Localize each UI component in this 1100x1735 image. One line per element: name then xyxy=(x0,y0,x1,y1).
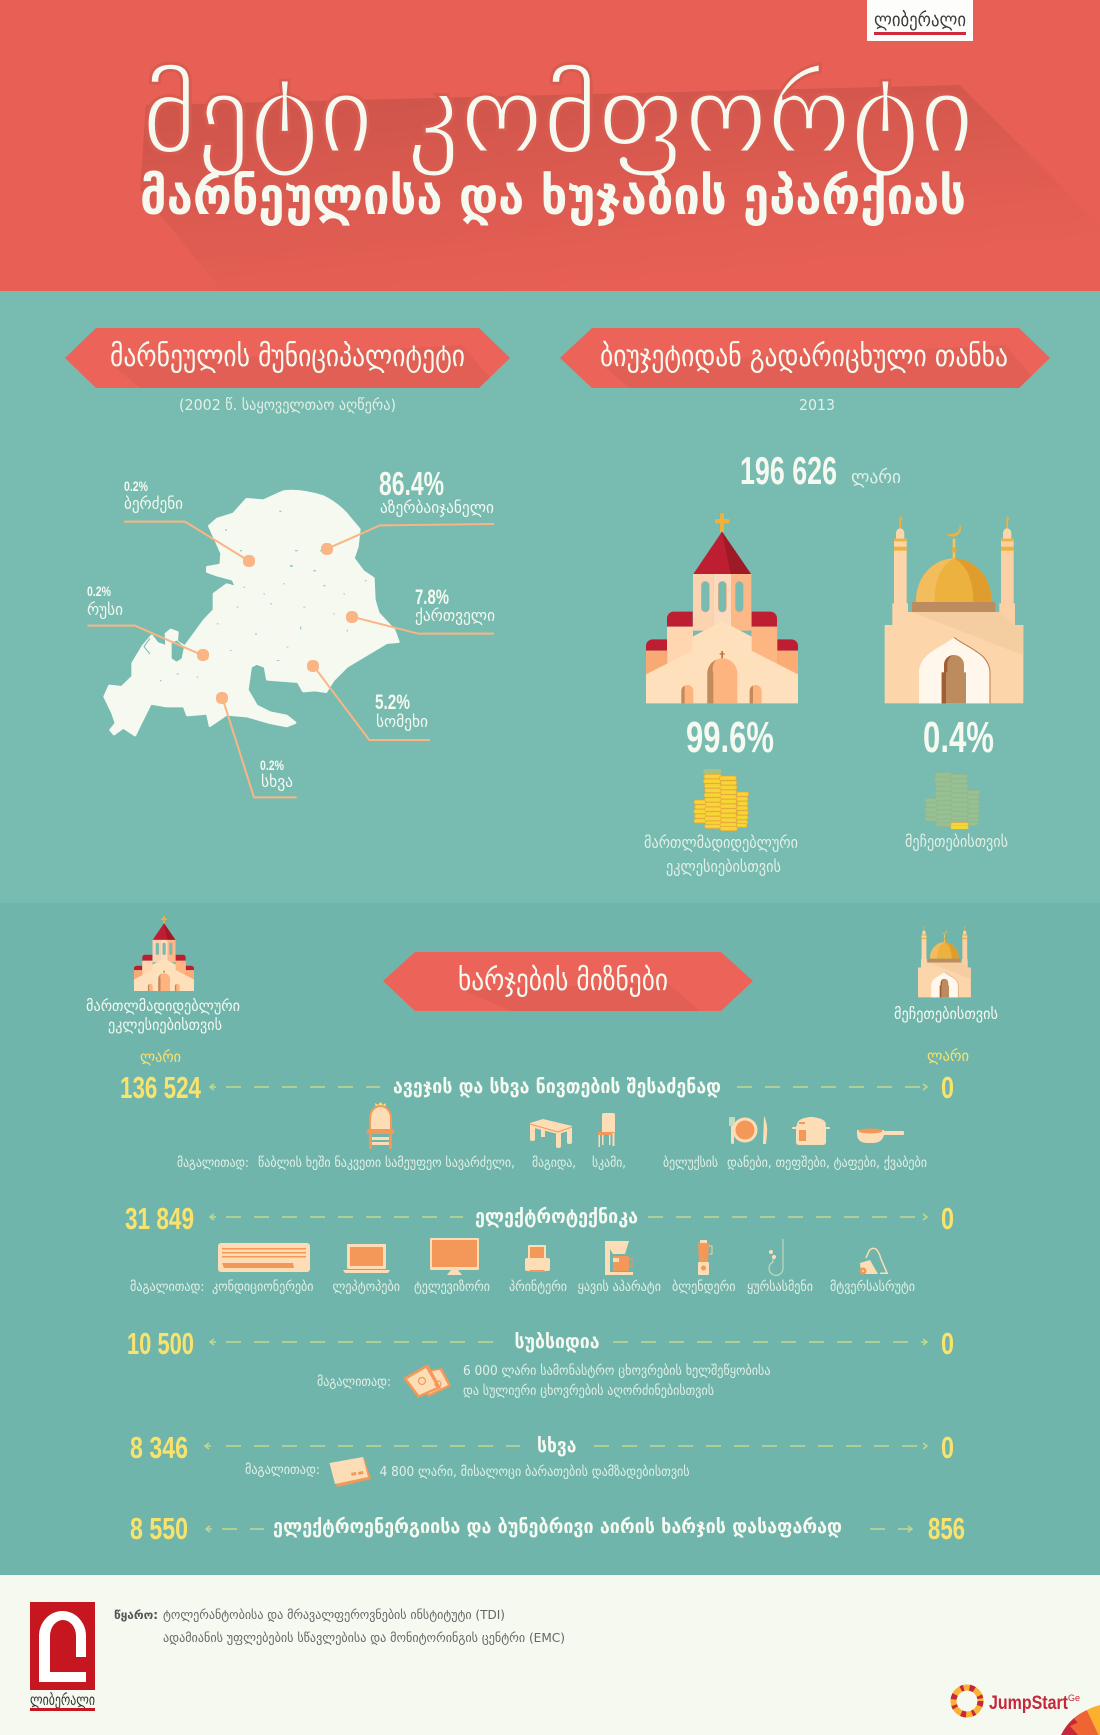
arrow right xyxy=(737,1084,927,1090)
icon: plate and cutlery xyxy=(729,1116,767,1144)
arrow right xyxy=(613,1339,927,1345)
background: teal page xyxy=(0,291,1100,904)
callout lines xyxy=(87,522,494,797)
row: subsidy: 10 500 xyxy=(127,1326,194,1361)
row: other: სხვა xyxy=(537,1433,576,1457)
row: furniture: ავეჯის და სხვა ნივთების შესაძენად xyxy=(393,1074,721,1098)
header panel xyxy=(0,0,1100,291)
label: Other: 0.2% xyxy=(260,757,284,773)
title long shadow xyxy=(140,85,1100,291)
row: electronics: 0 xyxy=(941,1201,954,1236)
arrow right xyxy=(594,1443,927,1449)
logo: JumpStart: JumpStart xyxy=(989,1693,1069,1714)
percent: mosques: 0.4% xyxy=(923,713,994,762)
banner: municipality xyxy=(65,328,510,388)
examples text: ბელუქსის xyxy=(663,1155,718,1171)
row: subsidy xyxy=(127,1326,954,1399)
label: Russian xyxy=(87,583,123,619)
label: Other: სხვა xyxy=(261,772,293,791)
arrow left xyxy=(210,1084,380,1090)
row: other: 0 xyxy=(941,1430,954,1465)
icon: blender xyxy=(698,1240,712,1275)
banner: municipality: მარნეულის მუნიციპალიტეტი xyxy=(110,339,465,374)
row: utilities xyxy=(130,1511,965,1546)
row: utilities: 856 xyxy=(928,1511,965,1546)
map: Marneuli ethnic composition xyxy=(87,465,495,797)
caption: mosques: მეჩეთებისთვის xyxy=(905,832,1008,851)
small church caption xyxy=(86,997,240,1034)
arrow left xyxy=(210,1214,463,1220)
sources xyxy=(114,1607,565,1645)
label: Greek: 0.2% xyxy=(124,478,148,494)
icon: coins faded stack xyxy=(925,773,980,829)
corner sun graphic xyxy=(1061,1705,1100,1735)
row: other: მაგალითად: xyxy=(245,1462,320,1478)
row: electronics: 31 849 xyxy=(125,1201,194,1236)
banner: spending purposes: ხარჯების მიზნები xyxy=(458,963,668,998)
subsidy description: და სულიერი ცხოვრების აღორძინებისთვის xyxy=(463,1382,714,1399)
subsidy description xyxy=(463,1362,771,1399)
label: Russian: 0.2% xyxy=(87,583,111,599)
icon: chair xyxy=(598,1113,615,1147)
label: Azerbaijani: 86.4% xyxy=(379,465,444,502)
logo: Liberali xyxy=(30,1602,95,1711)
label: Other xyxy=(260,757,293,791)
logo: JumpStart: Ge xyxy=(1068,1693,1080,1703)
icon: coffee machine xyxy=(605,1241,633,1275)
subtitle: მარნეულისა და ხუჯაბის ეპარქიას xyxy=(140,167,966,227)
icon: printer xyxy=(525,1245,550,1272)
card description: 4 800 ლარი, მისალოცი ბარათების დამზადებისთვის xyxy=(380,1463,690,1480)
icon: laptop xyxy=(343,1244,390,1273)
icon: pan xyxy=(857,1128,904,1143)
label: Georgian: 7.8% xyxy=(415,586,449,609)
label: Armenian: 5.2% xyxy=(375,691,410,714)
year: 2013 xyxy=(799,396,835,414)
icon: mosque xyxy=(885,515,1023,703)
logo tag xyxy=(867,0,973,41)
examples text xyxy=(177,1154,927,1171)
census note: (2002 წ. საყოველთაო აღწერა) xyxy=(179,396,396,414)
icon: church xyxy=(646,513,798,703)
label: Georgian: ქართველი xyxy=(415,606,495,625)
footer panel xyxy=(0,1575,1100,1735)
row: furniture: 0 xyxy=(941,1070,954,1105)
label: Armenian: სომეხი xyxy=(376,712,428,731)
electronics labels: მაგალითად: xyxy=(130,1279,204,1295)
arrow left xyxy=(210,1339,502,1345)
icon: greeting card xyxy=(330,1457,371,1487)
arrow left xyxy=(206,1526,264,1532)
icon: throne xyxy=(366,1102,394,1149)
row: furniture: 136 524 xyxy=(120,1070,202,1105)
logo tag: ლიბერალი xyxy=(874,9,966,31)
banner: budget transfer: ბიუჯეტიდან გადარიცხული თანხა xyxy=(600,339,1008,374)
label: Greek: ბერძენი xyxy=(124,494,183,513)
title: მეტი კომფორტი xyxy=(142,54,974,177)
icon: air conditioner xyxy=(218,1243,310,1272)
icon: television xyxy=(430,1238,479,1275)
arrow left xyxy=(205,1443,520,1449)
small church icon xyxy=(134,916,194,991)
examples text: დანები, თეფშები, ტაფები, ქვაბები xyxy=(727,1155,927,1171)
label: Georgian xyxy=(415,586,495,625)
sources: წყარო: xyxy=(114,1608,158,1622)
total sum: ლარი xyxy=(851,467,901,488)
total sum: 196 626 xyxy=(740,450,837,493)
examples text: წაბლის ხეში ნაკვეთი სამეუფეო სავარძელი, xyxy=(258,1154,515,1171)
electronics labels: მტვერსასრუტი xyxy=(830,1278,915,1295)
electronics labels xyxy=(130,1278,915,1295)
panel: spending purposes xyxy=(0,903,1100,1575)
electronics labels: პრინტერი xyxy=(509,1278,567,1295)
caption: churches xyxy=(644,833,798,876)
icon: banknotes xyxy=(403,1364,451,1398)
map shape xyxy=(105,491,398,735)
banner: spending purposes xyxy=(383,952,753,1011)
icon: table xyxy=(530,1119,572,1148)
row: subsidy: 0 xyxy=(941,1326,954,1361)
caption: churches: მართლმადიდებლური xyxy=(644,833,798,852)
electronics labels: ლეპტოპები xyxy=(332,1279,400,1295)
subsidy description: 6 000 ლარი სამონასტრო ცხოვრების ხელშეწყობისა xyxy=(463,1362,771,1379)
banner: budget transfer xyxy=(560,328,1050,388)
small mosque icon xyxy=(918,925,971,997)
arrow right xyxy=(870,1526,912,1532)
icon: vacuum cleaner xyxy=(860,1248,888,1274)
label: Armenian xyxy=(375,691,428,731)
row: electronics xyxy=(125,1201,954,1295)
electronics labels: ბლენდერი xyxy=(672,1278,736,1295)
row: other: 8 346 xyxy=(130,1430,188,1465)
row: furniture xyxy=(120,1070,954,1171)
small mosque caption: მეჩეთებისთვის xyxy=(894,1005,998,1023)
electronics labels: ყავის აპარატი xyxy=(578,1278,661,1295)
label: Greek xyxy=(124,478,183,513)
row: subsidy: მაგალითად: xyxy=(317,1374,391,1390)
electronics labels: ტელევიზორი xyxy=(414,1278,490,1295)
electronics labels: ყურსასმენი xyxy=(747,1278,813,1295)
small church caption: მართლმადიდებლური xyxy=(86,997,240,1015)
icon: coins large stack xyxy=(694,769,749,831)
icon: pot xyxy=(792,1117,830,1145)
small church caption: ეკლესიებისთვის xyxy=(108,1016,222,1034)
row: other xyxy=(130,1430,954,1487)
callout dots xyxy=(197,543,358,704)
sources: ტოლერანტობისა და მრავალფეროვნების ინსტიტუტი (TDI) xyxy=(163,1607,505,1622)
examples text: მაგალითად: xyxy=(177,1155,249,1171)
logo: Liberali: ლიბერალი xyxy=(30,1691,95,1709)
label: Azerbaijani: აზერბაიჯანელი xyxy=(380,498,494,517)
row: utilities: ელექტროენერგიისა და ბუნებრივი აირის ხარჯის დასაფარად xyxy=(273,1514,842,1538)
label: Azerbaijani xyxy=(379,465,494,517)
sources: ადამიანის უფლებების სწავლებისა და მონიტორინგის ცენტრი (EMC) xyxy=(163,1630,565,1645)
icon: earphones xyxy=(769,1239,783,1275)
arrow right xyxy=(648,1214,927,1220)
examples text: მაგიდა, xyxy=(532,1155,576,1171)
examples text: სკამი, xyxy=(592,1155,626,1171)
currency label left: ლარი xyxy=(140,1048,181,1066)
currency label right: ლარი xyxy=(927,1047,969,1065)
electronics labels: კონდიციონერები xyxy=(212,1278,314,1295)
label: Russian: რუსი xyxy=(87,600,123,619)
row: subsidy: სუბსიდია xyxy=(514,1329,600,1353)
logo: JumpStart xyxy=(954,1688,1080,1714)
row: utilities: 8 550 xyxy=(130,1511,188,1546)
caption: churches: ეკლესიებისთვის xyxy=(666,857,781,876)
percent: churches: 99.6% xyxy=(686,713,774,762)
row: electronics: ელექტროტექნიკა xyxy=(475,1204,638,1228)
